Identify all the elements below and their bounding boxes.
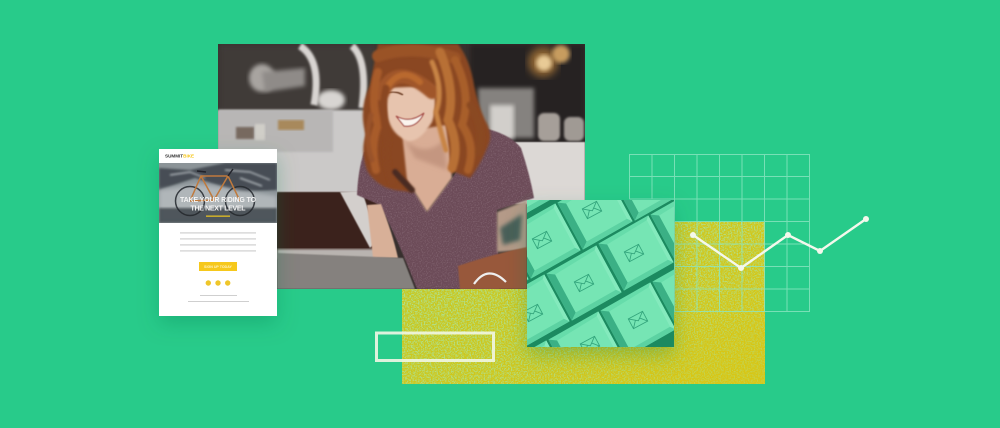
face: [384, 86, 435, 141]
email dots: [206, 280, 230, 286]
smile: [396, 113, 424, 126]
email footer lines: [188, 295, 249, 302]
hair back: [363, 44, 490, 192]
email button: SIGN UP TODAY: [204, 265, 233, 269]
email body lines: [180, 232, 256, 252]
woman: [357, 44, 534, 289]
white outlined rectangle: [376, 333, 494, 360]
laptop: [277, 253, 415, 289]
photo: woman at laptop: [218, 44, 585, 289]
tattooed arm: [497, 200, 527, 252]
hair strands: [368, 50, 481, 190]
left arm: [367, 204, 398, 258]
email headline: THE NEXT LEVEL: [190, 206, 246, 212]
email hero image: [159, 163, 277, 223]
email logo: SUMMITBIKE: [165, 153, 194, 158]
email button: [199, 262, 237, 271]
keyboard photo with envelope keys: [516, 196, 685, 366]
bike: [176, 169, 254, 216]
grid: [630, 154, 810, 312]
chest and neck: [402, 125, 452, 212]
yellow noise panel: [402, 222, 765, 384]
email card: [159, 149, 277, 316]
bag: [458, 247, 527, 289]
envelope icons: [523, 201, 648, 354]
email headline: TAKE YOUR RIDING TO: [180, 197, 257, 204]
email headline: [180, 197, 257, 212]
shirt: [357, 128, 534, 289]
line chart: [690, 216, 869, 271]
photo background blurred cafe: [218, 44, 585, 259]
